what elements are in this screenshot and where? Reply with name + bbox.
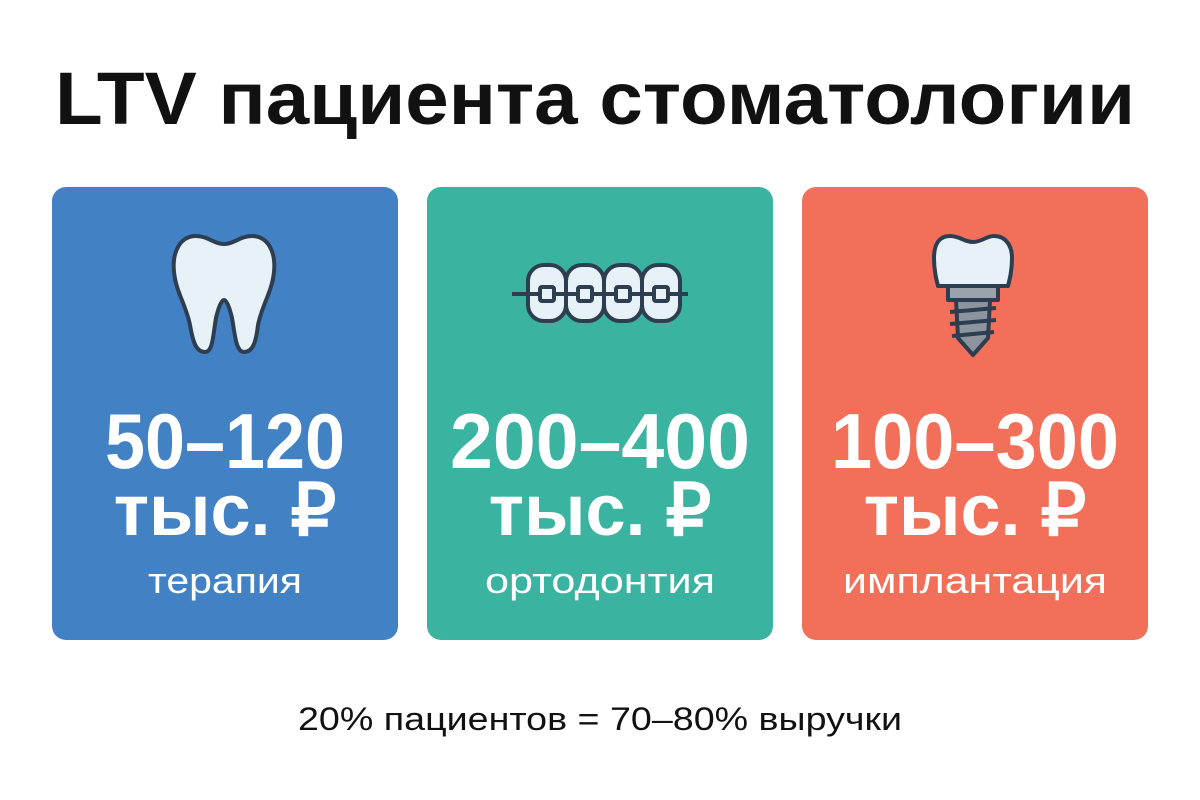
icon: tooth: [174, 236, 274, 352]
label: терапия: [148, 560, 302, 601]
unit: тыс. ₽: [489, 471, 711, 551]
unit: тыс. ₽: [114, 471, 336, 551]
icon: braces: [512, 265, 688, 321]
panel: therapy: [52, 187, 398, 640]
number: 200–400: [450, 397, 750, 485]
number: 100–300: [831, 397, 1119, 485]
title: LTV пациента стоматологии: [55, 57, 1135, 140]
panel: implantation: [802, 187, 1148, 640]
unit: тыс. ₽: [864, 471, 1086, 551]
label: ортодонтия: [485, 560, 715, 601]
panel: orthodontics: [427, 187, 773, 640]
footer note: 20% пациентов = 70–80% выручки: [298, 701, 902, 737]
label: имплантация: [843, 560, 1107, 601]
number: 50–120: [105, 397, 345, 485]
icon: implant: [934, 236, 1012, 355]
